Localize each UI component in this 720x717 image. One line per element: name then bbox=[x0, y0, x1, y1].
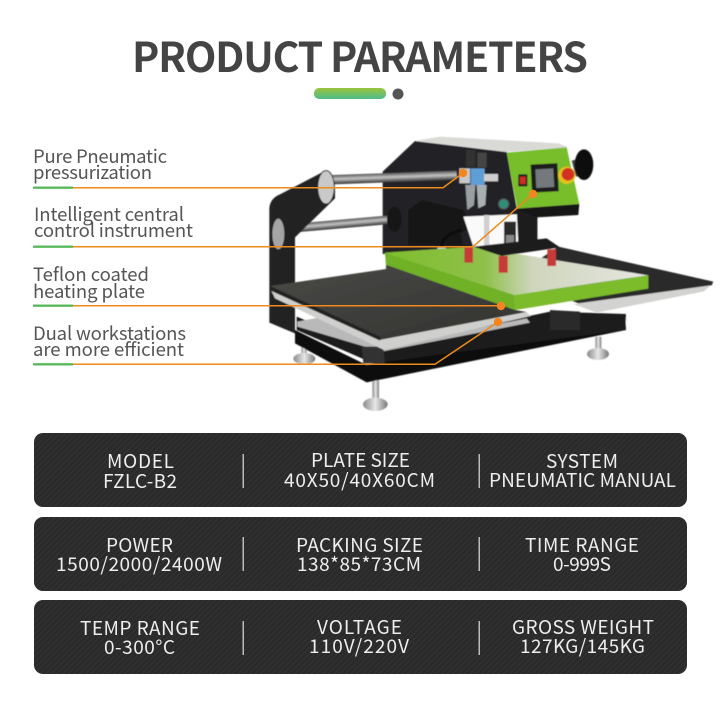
callout: pneumatic pressurization: Pure Pneumatic bbox=[33, 143, 167, 169]
callout: dual workstations bbox=[33, 318, 502, 364]
rear body bbox=[383, 141, 537, 254]
spec: plate size: PLATE SIZE bbox=[311, 446, 410, 473]
spec: power: POWER bbox=[106, 531, 173, 558]
rear cylinder bbox=[572, 149, 593, 180]
callout: control instrument bbox=[33, 190, 537, 247]
panel: row 1 specs bbox=[34, 433, 687, 507]
press shaft bbox=[484, 215, 516, 253]
spec: time range: 0-999S bbox=[553, 550, 611, 577]
spec: voltage: 110V/220V bbox=[309, 632, 409, 659]
spec: gross weight: GROSS WEIGHT bbox=[512, 613, 654, 640]
emergency stop button bbox=[558, 167, 575, 184]
rod end cap side bbox=[272, 219, 284, 249]
handle bbox=[517, 204, 579, 217]
spec: gross weight bbox=[512, 613, 654, 659]
spec: temp range: 0-300°C bbox=[104, 633, 175, 660]
lower rod bbox=[298, 215, 395, 232]
press mount plate bbox=[473, 238, 560, 256]
spec: model: MODEL bbox=[107, 447, 174, 474]
spec: power bbox=[56, 531, 222, 577]
spec: voltage bbox=[309, 613, 409, 659]
pressure hose bbox=[442, 230, 462, 247]
callout: control instrument: Intelligent central bbox=[34, 201, 184, 227]
title: PRODUCT PARAMETERS bbox=[132, 24, 588, 84]
spec: time range: TIME RANGE bbox=[525, 531, 639, 558]
title accent: green bar and dot bbox=[314, 88, 404, 100]
rod end cap top bbox=[318, 171, 334, 204]
product image: heat press machine bbox=[269, 137, 713, 411]
callout: teflon heating plate: heating plate bbox=[33, 278, 145, 304]
spec: voltage: VOLTAGE bbox=[317, 613, 402, 640]
callout: teflon heating plate bbox=[33, 261, 505, 310]
spec: system: SYSTEM bbox=[546, 447, 618, 474]
green indicator button bbox=[499, 199, 509, 209]
base frame bbox=[295, 315, 626, 382]
top silver cover bbox=[415, 137, 568, 152]
red springs bbox=[464, 247, 556, 273]
spec: packing size: 138*85*73CM bbox=[297, 550, 421, 577]
foot rear left bbox=[293, 343, 315, 364]
near left workstation pad bbox=[270, 265, 527, 340]
spec: gross weight: 127KG/145KG bbox=[520, 632, 645, 659]
spec: time range bbox=[525, 531, 639, 577]
green heating plate top bbox=[385, 247, 648, 295]
cutout under body bbox=[408, 200, 473, 245]
spec: temp range: TEMP RANGE bbox=[80, 614, 200, 641]
rod collar bbox=[387, 207, 402, 232]
callout: dual workstations: are more efficient bbox=[33, 336, 184, 362]
callout: pneumatic pressurization: pressurization bbox=[33, 159, 152, 185]
spec: packing size: PACKING SIZE bbox=[296, 531, 423, 558]
upper rod bbox=[332, 171, 457, 184]
spec: packing size bbox=[296, 531, 423, 577]
spec: temp range bbox=[80, 614, 200, 660]
spec: plate size bbox=[284, 446, 435, 493]
touch screen bbox=[531, 163, 559, 193]
control panel housing bbox=[507, 147, 579, 209]
red power switch bbox=[518, 174, 527, 186]
panel: row 2 specs bbox=[34, 517, 687, 591]
plate front edges bbox=[385, 253, 515, 310]
callout: control instrument: control instrument bbox=[34, 217, 193, 243]
air filter regulator bbox=[459, 150, 498, 210]
foot rear right bbox=[587, 337, 609, 360]
spec: power: 1500/2000/2400W bbox=[56, 550, 222, 577]
callout: pneumatic pressurization bbox=[33, 143, 467, 188]
foot front bbox=[363, 380, 388, 411]
panel: row 3 specs bbox=[34, 600, 687, 674]
spec: plate size: 40X50/40X60CM bbox=[284, 466, 435, 493]
spec: system bbox=[489, 447, 676, 493]
callout: dual workstations: Dual workstations bbox=[33, 320, 186, 346]
callout: teflon heating plate: Teflon coated bbox=[33, 261, 149, 287]
spec: model: FZLC-B2 bbox=[103, 467, 177, 494]
left arm bbox=[269, 173, 335, 333]
far right workstation pad bbox=[513, 247, 713, 304]
spec: system: PNEUMATIC MANUAL bbox=[489, 466, 676, 493]
green plate overlap bbox=[385, 253, 515, 310]
spec: model bbox=[103, 447, 177, 494]
hose fitting bbox=[437, 247, 446, 256]
